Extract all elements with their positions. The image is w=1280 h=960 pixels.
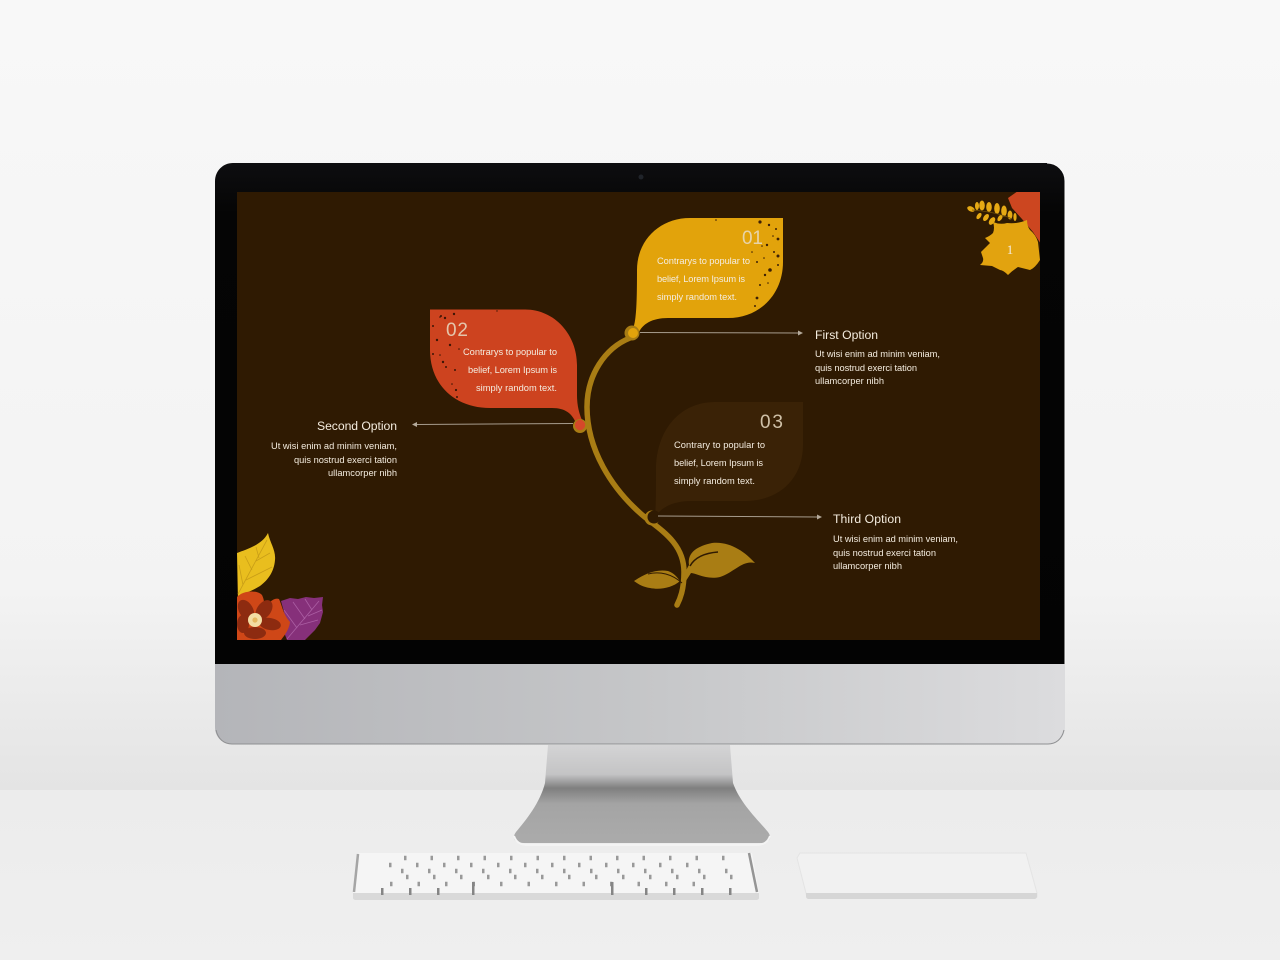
arrow: card 01 to First Option <box>640 330 803 336</box>
number 03: 03 <box>760 412 783 433</box>
monitor stand <box>514 745 770 845</box>
text block: First Option: Ut wisi enim ad minim veniam, <box>815 349 940 359</box>
text block: Second Option <box>271 419 397 478</box>
monitor body <box>215 163 1065 744</box>
card 02 text: simply random text. <box>476 383 557 393</box>
text block: Third Option: Third Option <box>833 512 901 526</box>
text block: Second Option: Second Option <box>317 419 397 433</box>
decoration: autumn leaves, top right <box>966 191 1041 275</box>
text block: First Option: quis nostrud exerci tation <box>815 363 917 373</box>
text block: Second Option: ullamcorper nibh <box>328 468 397 478</box>
arrow: card 02 to Second Option <box>412 422 573 427</box>
text block: First Option: First Option <box>815 328 878 342</box>
card 01 text: belief, Lorem Ipsum is <box>657 274 745 284</box>
keyboard <box>353 853 759 900</box>
decoration: flower and leaves, bottom left <box>234 533 323 640</box>
trackpad <box>797 853 1037 899</box>
number 01: 01 <box>742 228 763 249</box>
card 02 text <box>463 347 557 393</box>
card 03 text: Contrary to popular to <box>674 440 765 450</box>
slide screen <box>237 192 1040 640</box>
node: card 01 connector <box>624 326 640 340</box>
leaf card 02 <box>430 310 584 424</box>
leaf card 03 <box>655 402 803 518</box>
icon: yellow leaf <box>237 533 275 596</box>
text block: Third Option: ullamcorper nibh <box>833 561 902 571</box>
icon: purple leaf <box>280 597 323 640</box>
node: card 03 connector <box>644 510 660 526</box>
card 01 text: simply random text. <box>657 292 737 302</box>
text block: Third Option: Ut wisi enim ad minim veniam, <box>833 534 958 544</box>
text block: First Option: ullamcorper nibh <box>815 376 884 386</box>
text block: First Option <box>815 328 940 386</box>
icon: red flower <box>234 591 290 640</box>
card 03 text <box>674 440 765 486</box>
text block: Second Option: Ut wisi enim ad minim veniam, <box>271 441 397 451</box>
card 03 text: belief, Lorem Ipsum is <box>674 458 763 468</box>
page number: 1 <box>1007 242 1013 257</box>
arrow: card 03 to Third Option <box>658 514 822 520</box>
text block: Third Option: quis nostrud exerci tation <box>833 548 936 558</box>
card 02 text: Contrarys to popular to <box>463 347 557 357</box>
text block: Third Option <box>833 512 958 571</box>
card 03 text: simply random text. <box>674 476 755 486</box>
plant stem <box>587 338 755 605</box>
node: card 02 connector <box>573 419 587 433</box>
card 01 text: Contrarys to popular to <box>657 256 750 266</box>
card 01 text <box>657 256 750 302</box>
number 02: 02 <box>446 320 468 341</box>
text block: Second Option: quis nostrud exerci tation <box>294 455 397 465</box>
infographic canvas <box>0 163 1280 900</box>
leaf card 01 <box>631 218 783 334</box>
speckles on card 01 <box>715 219 780 307</box>
icon: small sprout leaf <box>634 571 680 589</box>
icon: large sprout leaf <box>684 543 755 584</box>
card 02 text: belief, Lorem Ipsum is <box>468 365 557 375</box>
speckles on card 02 <box>432 310 498 398</box>
